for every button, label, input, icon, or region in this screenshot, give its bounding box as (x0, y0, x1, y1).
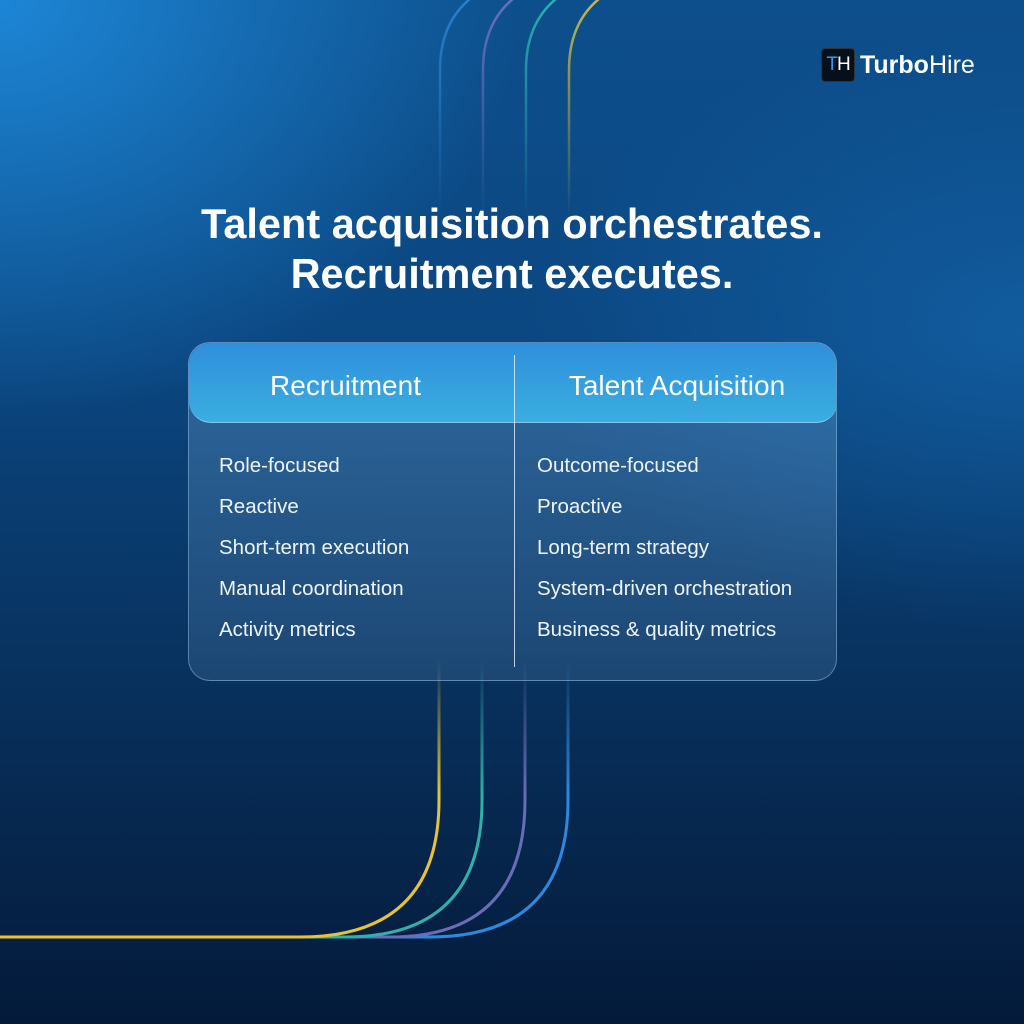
header bar (189, 343, 838, 423)
list: talent acquisition (537, 454, 792, 641)
header: Talent Acquisition: Talent Acquisition (569, 370, 785, 401)
list: talent acquisition: Outcome-focused (537, 454, 699, 477)
title (201, 200, 823, 297)
comparison card (188, 342, 837, 681)
list: talent acquisition: System-driven orchestration (537, 577, 792, 600)
header: Recruitment: Recruitment (270, 370, 421, 401)
list: recruitment: Short-term execution (219, 536, 409, 559)
title: Talent acquisition orchestrates. (201, 200, 823, 247)
title: Recruitment executes. (291, 250, 733, 297)
list: recruitment: Role-focused (219, 454, 340, 477)
list: talent acquisition: Long-term strategy (537, 536, 709, 559)
list: recruitment: Manual coordination (219, 577, 404, 600)
list: recruitment (219, 454, 409, 641)
list: talent acquisition: Business & quality metrics (537, 618, 776, 641)
decorative lines (0, 0, 600, 938)
text: TurboHire (860, 51, 975, 79)
list: recruitment: Reactive (219, 495, 299, 518)
text: TH (826, 54, 850, 75)
logo (821, 48, 975, 82)
list: talent acquisition: Proactive (537, 495, 622, 518)
list: recruitment: Activity metrics (219, 618, 356, 641)
